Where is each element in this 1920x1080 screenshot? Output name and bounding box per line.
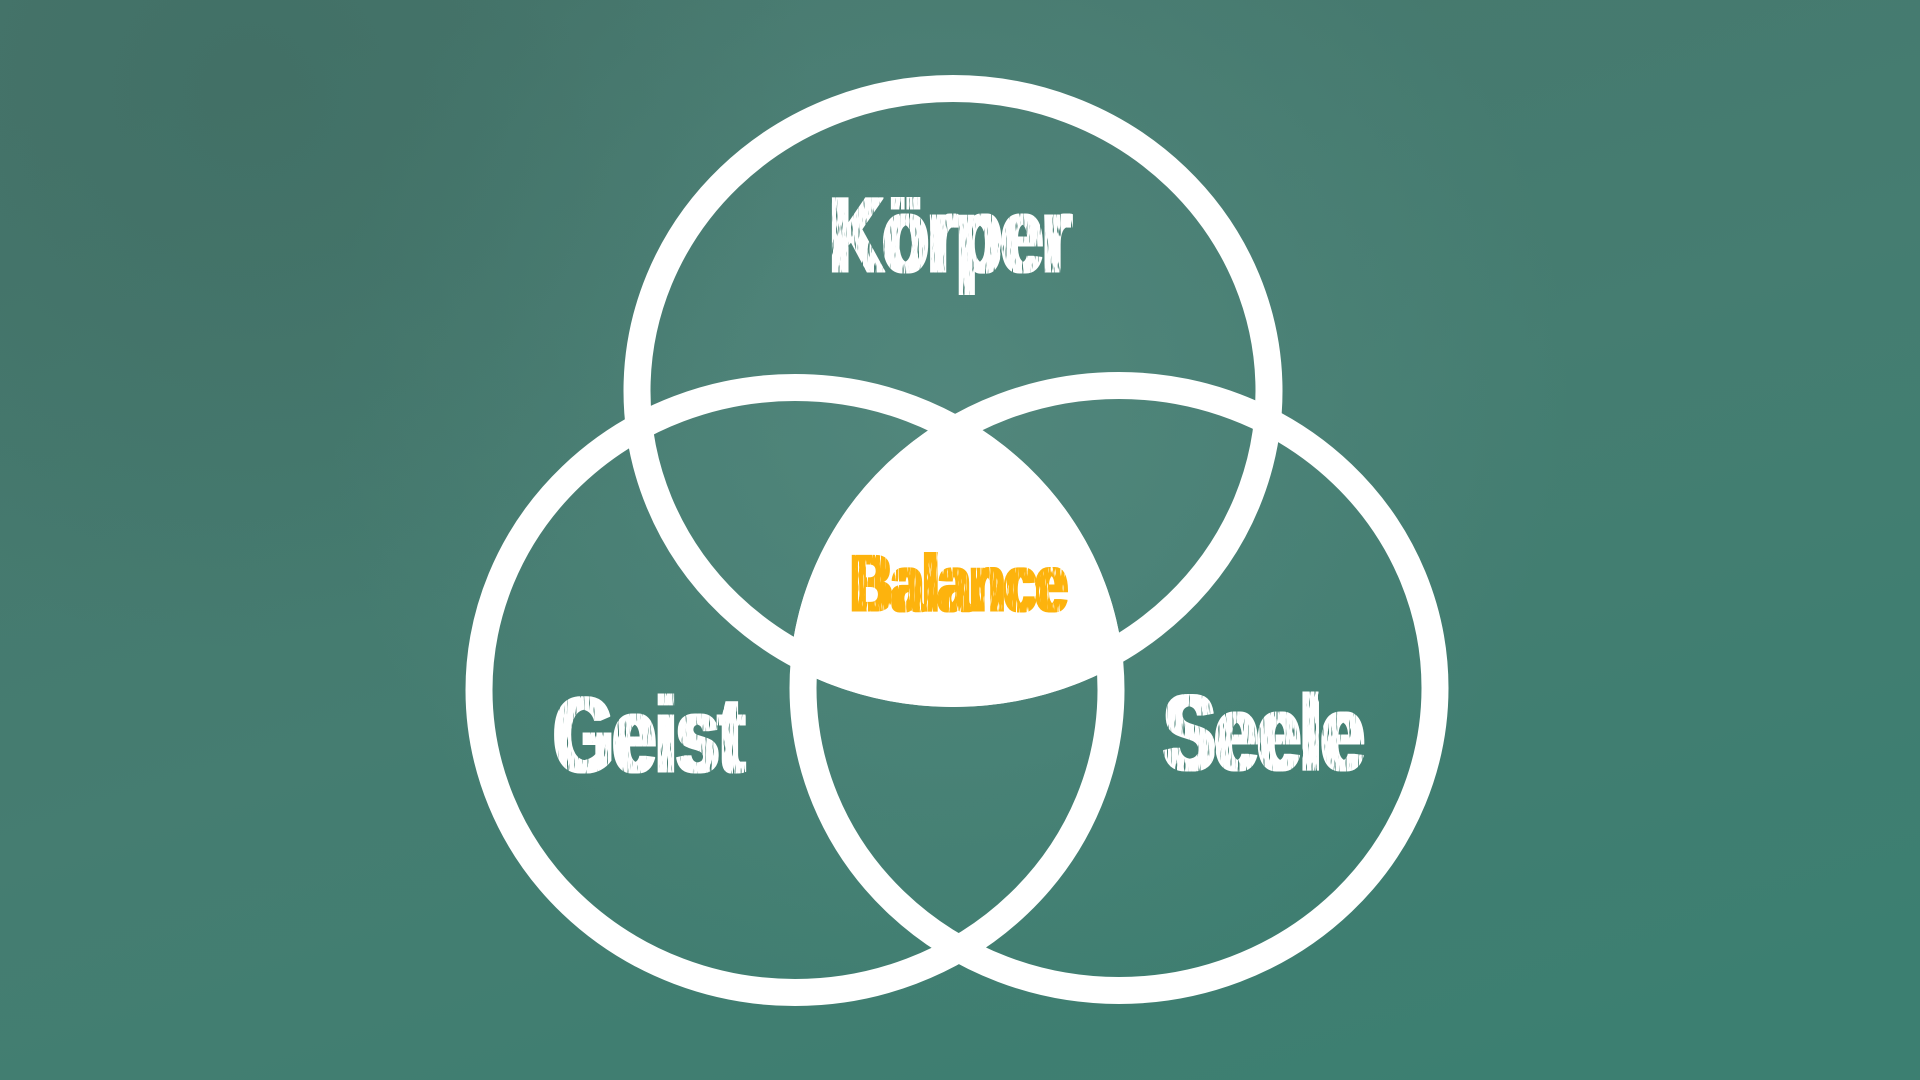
label: Seele: Seele [1164,672,1364,793]
centre filled intersection [794,430,1119,707]
label: Balance: Balance [851,539,1067,629]
circle: Geist [479,388,1111,992]
circle: Seele [803,386,1435,990]
label: Körper: Körper [830,174,1071,295]
label: Geist: Geist [554,674,744,795]
circle: Körper [637,88,1269,694]
